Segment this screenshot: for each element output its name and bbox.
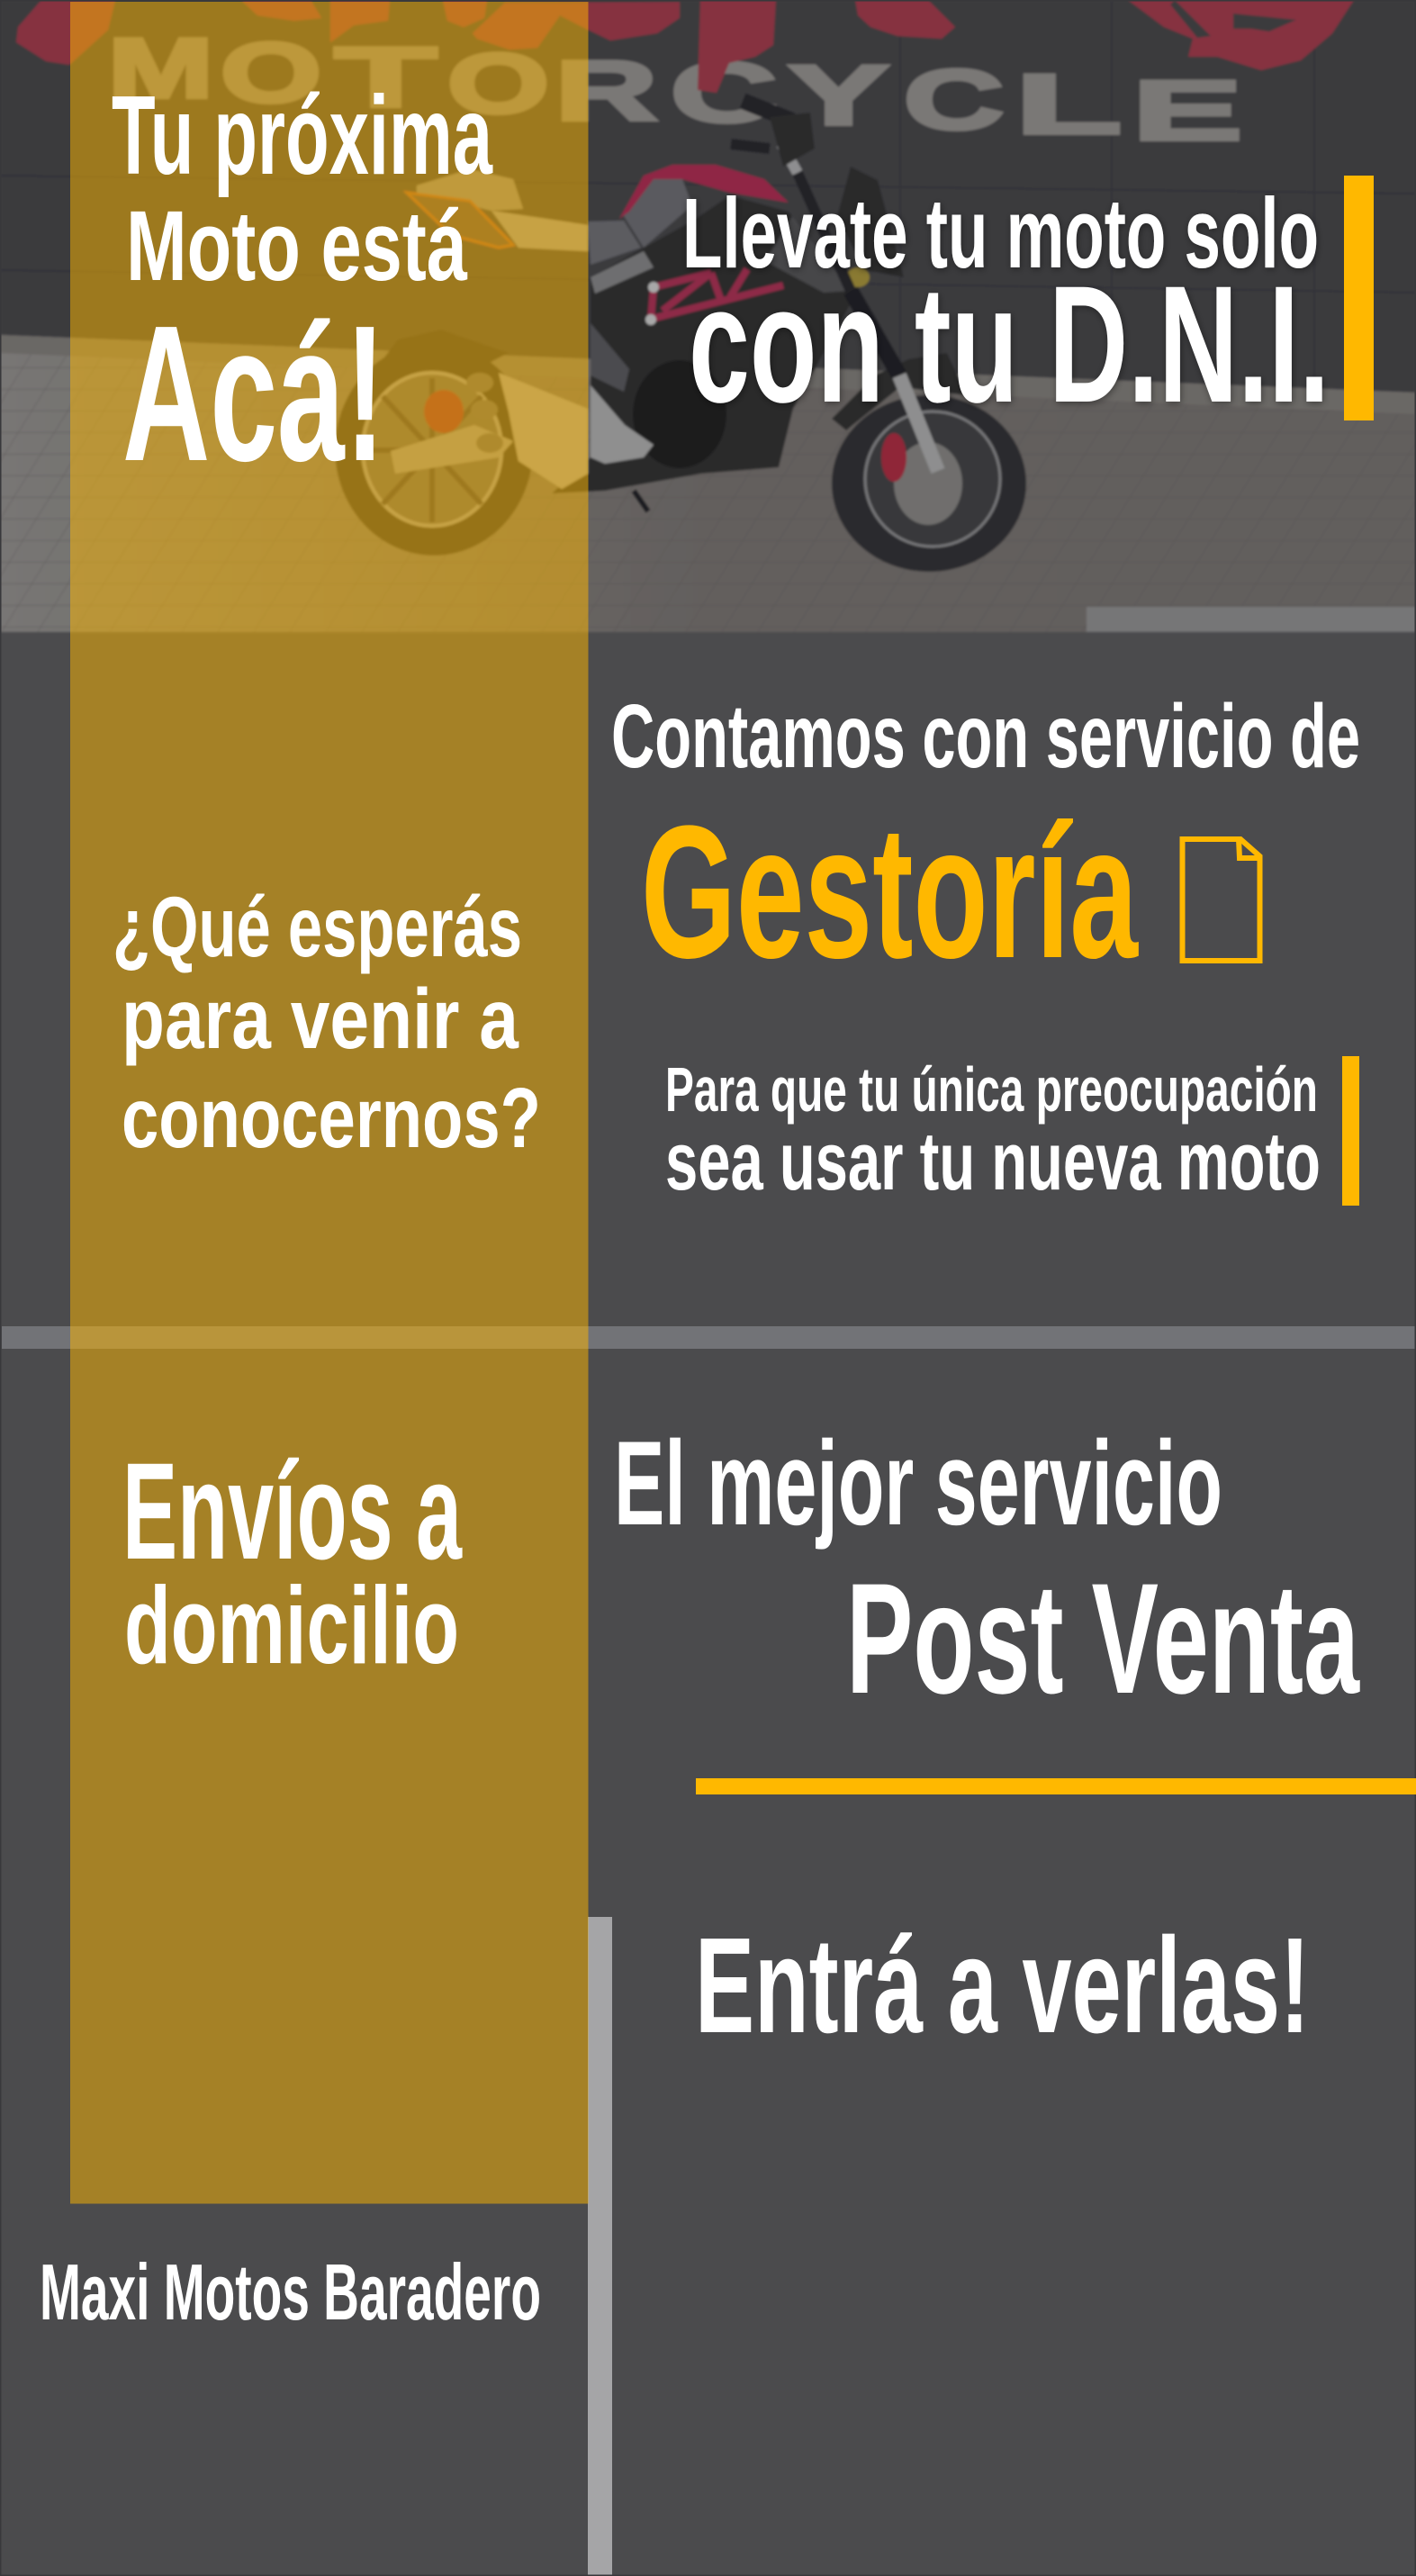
fuel tank [624,179,692,248]
icon: document [1183,839,1260,961]
wall lettering: O [221,25,321,120]
text: Maxi Motos Baradero: Maxi Motos Baradero [40,2247,541,2336]
rear fender [378,330,509,373]
seat cover bag [417,169,523,211]
wall lettering: R [555,43,657,138]
wall lettering: O [447,36,549,131]
wall lettering [108,21,1242,158]
paved floor [0,335,1416,632]
seat [588,221,641,265]
heading: Gestoría: Gestoría [641,786,1139,998]
text: Para que tu única preocupación [665,1054,1321,1207]
wall lettering: C [671,45,777,140]
wall lettering: L [1015,57,1122,151]
red trellis frame [648,269,783,320]
text: ¿Qué esperás para venir a conocernos?: conocernos? [122,1071,541,1166]
wall lettering: E [1132,63,1242,158]
text: Envíos a domicilio: Envíos a [122,1434,463,1588]
accent bar: D.N.I. [1344,176,1374,420]
horizontal band [2,1326,1416,1349]
text: ¿Qué esperás para venir a conocernos?: para venir a [122,972,519,1067]
heading: Tu próxima Moto está Acá!: Moto está [126,191,468,302]
exhaust shield [499,373,588,489]
yellow column [70,2,589,2204]
floor tiles [0,353,1416,632]
red wall graffiti [16,0,1354,93]
text: ¿Qué esperás para venir a conocernos? [113,880,541,1166]
rear wheel [335,343,533,556]
front fork [851,291,899,375]
wall lettering: M [108,21,213,115]
grey vertical bar [588,1917,612,2576]
graffiti dark gaps [1170,0,1296,38]
body and engine [552,195,851,493]
engine block [633,360,726,468]
motorcycle [335,101,1026,572]
muffler [391,425,513,474]
wall lettering: T [335,30,437,124]
heading: Tu próxima Moto está Acá! [112,74,493,502]
panel: motorcycle photo [0,0,1416,632]
wall lettering: Y [789,48,888,142]
kerb [0,335,1416,414]
heading: Tu próxima Moto está Acá!: Tu próxima [112,74,493,198]
heading: con tu D.N.I. [682,178,1330,438]
text: Envíos a domicilio: domicilio [124,1564,459,1686]
heading: Tu próxima Moto está Acá!: Acá! [122,285,385,502]
tail light [407,193,513,248]
text: Envíos a domicilio [122,1434,463,1686]
handlebars [743,101,792,121]
front wheel [832,395,1026,572]
front fender [832,353,967,430]
text: ¿Qué esperás para venir a conocernos?: ¿Qué esperás [113,880,522,975]
headlight [837,167,904,277]
light pavement patch [1087,607,1416,632]
wall lettering: C [904,52,1004,147]
accent line: post venta [696,1778,1416,1794]
kickstand [634,491,648,511]
accent bar: preocupación [1342,1056,1359,1206]
wall panel seams [0,0,1416,387]
shop wall [0,0,1416,393]
side panels [591,251,654,294]
